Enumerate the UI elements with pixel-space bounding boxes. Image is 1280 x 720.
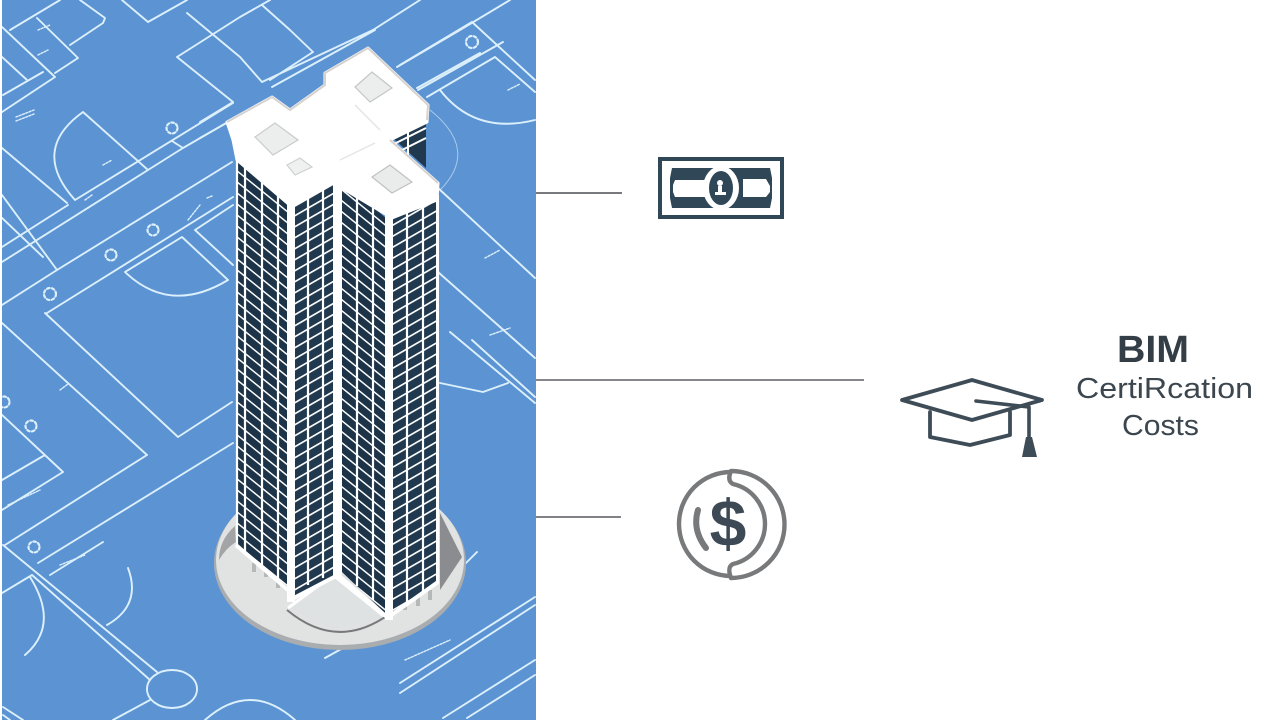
heading: BIM Certification Costs: Costs [1122, 410, 1199, 442]
heading: BIM Certification Costs [1076, 329, 1253, 442]
left tower [236, 150, 334, 602]
right tower [290, 178, 439, 620]
panel: blueprint background [0, 0, 536, 720]
rooftop unit: left [255, 123, 298, 155]
rooftop unit: front [372, 165, 412, 193]
blueprint symbols [0, 36, 478, 552]
roof [227, 48, 438, 218]
heading: BIM Certification Costs: BIM [1117, 329, 1189, 371]
rooftop unit: small [287, 158, 312, 175]
icon: graduation cap [902, 380, 1042, 457]
icon: dollar coin [679, 471, 784, 578]
connector line: bottom [536, 516, 621, 518]
back tower windows [390, 118, 426, 168]
icon: dollar coin: $ [710, 486, 746, 560]
heading: BIM Certification Costs: CertiRcation [1076, 373, 1253, 405]
connector line: top [536, 192, 622, 194]
connector line: middle [536, 379, 864, 381]
rooftop unit: back [355, 72, 392, 102]
icon: banknote [660, 159, 782, 217]
tower base disc [214, 475, 466, 650]
illustration: isometric tower [214, 48, 466, 650]
